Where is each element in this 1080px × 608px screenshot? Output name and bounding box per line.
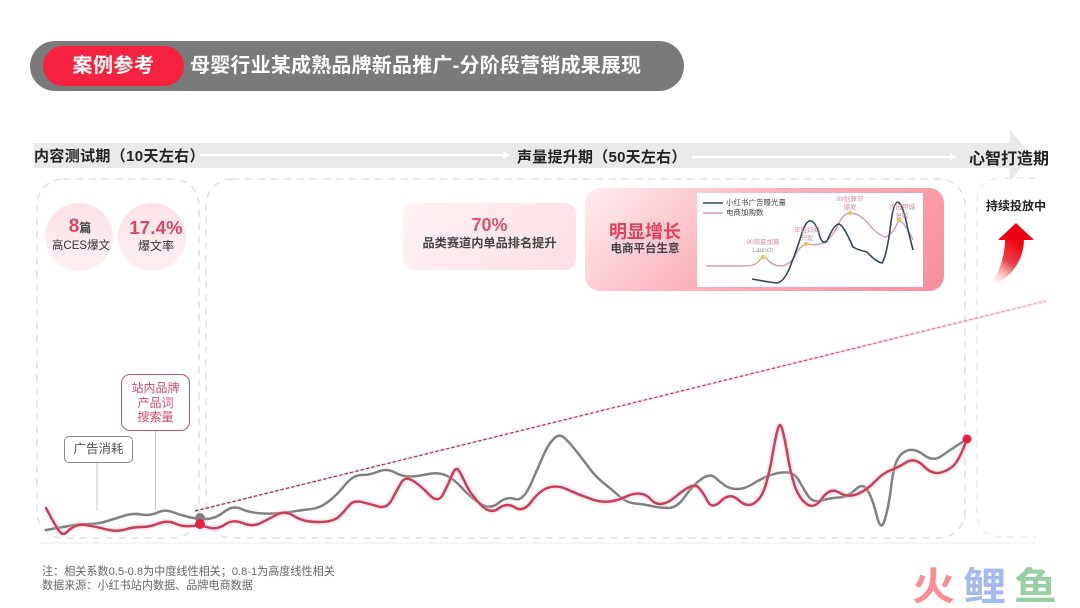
icon: rising red arrow bbox=[993, 223, 1034, 284]
callout: ad spend bbox=[64, 436, 133, 463]
callout: brand search volume: 搜索量 bbox=[137, 410, 174, 424]
mini line chart: 小红书广告曝光量 bbox=[726, 197, 786, 207]
mini line chart: 爆发 bbox=[844, 202, 857, 211]
callout leader lines bbox=[97, 431, 156, 511]
metric value: 8: 8篇 bbox=[69, 216, 91, 237]
label: ongoing delivery: 持续投放中 bbox=[986, 199, 1046, 213]
card heading: 明显增长 bbox=[609, 222, 681, 242]
metric caption: 爆文率 bbox=[138, 239, 174, 253]
mini line chart: Launch bbox=[752, 247, 774, 254]
metric circle: articles bbox=[45, 203, 113, 271]
footnote: 注：相关系数0.5-0.8为中度线性相关；0.8-1为高度线性相关 bbox=[42, 566, 335, 578]
callout: ad spend: 广告消耗 bbox=[73, 442, 124, 456]
mini line chart: 复购 bbox=[896, 211, 909, 220]
banner tag: 案例参考 bbox=[72, 55, 154, 77]
phase marker dots bbox=[195, 434, 972, 529]
mini line chart: 90周夏加算 bbox=[746, 237, 780, 246]
metric circle: rate bbox=[118, 203, 186, 271]
mini line chart bbox=[703, 194, 916, 284]
banner title: 母婴行业某成熟品牌新品推广-分阶段营销成果展现 bbox=[190, 55, 641, 77]
phase label: mindshare: 心智打造期 bbox=[969, 151, 1049, 168]
callout: brand search volume: 站内品牌 bbox=[131, 381, 180, 395]
phase label: content test: 内容测试期（10天左右） bbox=[34, 148, 205, 165]
mini line chart: 年轻妈妈 bbox=[794, 225, 820, 234]
mini line chart: 电商加购数 bbox=[726, 207, 764, 217]
metric value: 17.4%: 17.4% bbox=[129, 217, 183, 238]
top banner bbox=[30, 41, 684, 91]
dashed trend line bbox=[195, 301, 1046, 511]
mini line chart: 开发 bbox=[800, 233, 814, 242]
mini line chart: 杰出甲城 bbox=[889, 202, 916, 211]
callout: brand search volume bbox=[121, 374, 190, 431]
metric caption: 高CES爆文 bbox=[52, 240, 110, 252]
red line: brand search bbox=[46, 425, 967, 534]
phase arrow band bbox=[34, 130, 1031, 181]
card: ranking bbox=[403, 203, 576, 270]
banner tag bbox=[43, 46, 184, 86]
footnote bbox=[42, 565, 335, 592]
card value: 70% bbox=[471, 215, 508, 235]
card caption: 品类赛道内单品排名提升 bbox=[422, 236, 557, 250]
mini line chart: 99划算节 bbox=[837, 194, 864, 203]
white chart box bbox=[697, 193, 923, 287]
callout: brand search volume: 产品词 bbox=[137, 396, 174, 410]
phase label: volume growth: 声量提升期（50天左右） bbox=[517, 149, 687, 166]
footnote: 数据来源：小红书站内数据、品牌电商数据 bbox=[42, 580, 253, 592]
card: e-commerce growth bbox=[585, 188, 944, 291]
grey line: ad spend bbox=[46, 436, 967, 530]
card caption: 电商平台生意 bbox=[610, 243, 680, 255]
